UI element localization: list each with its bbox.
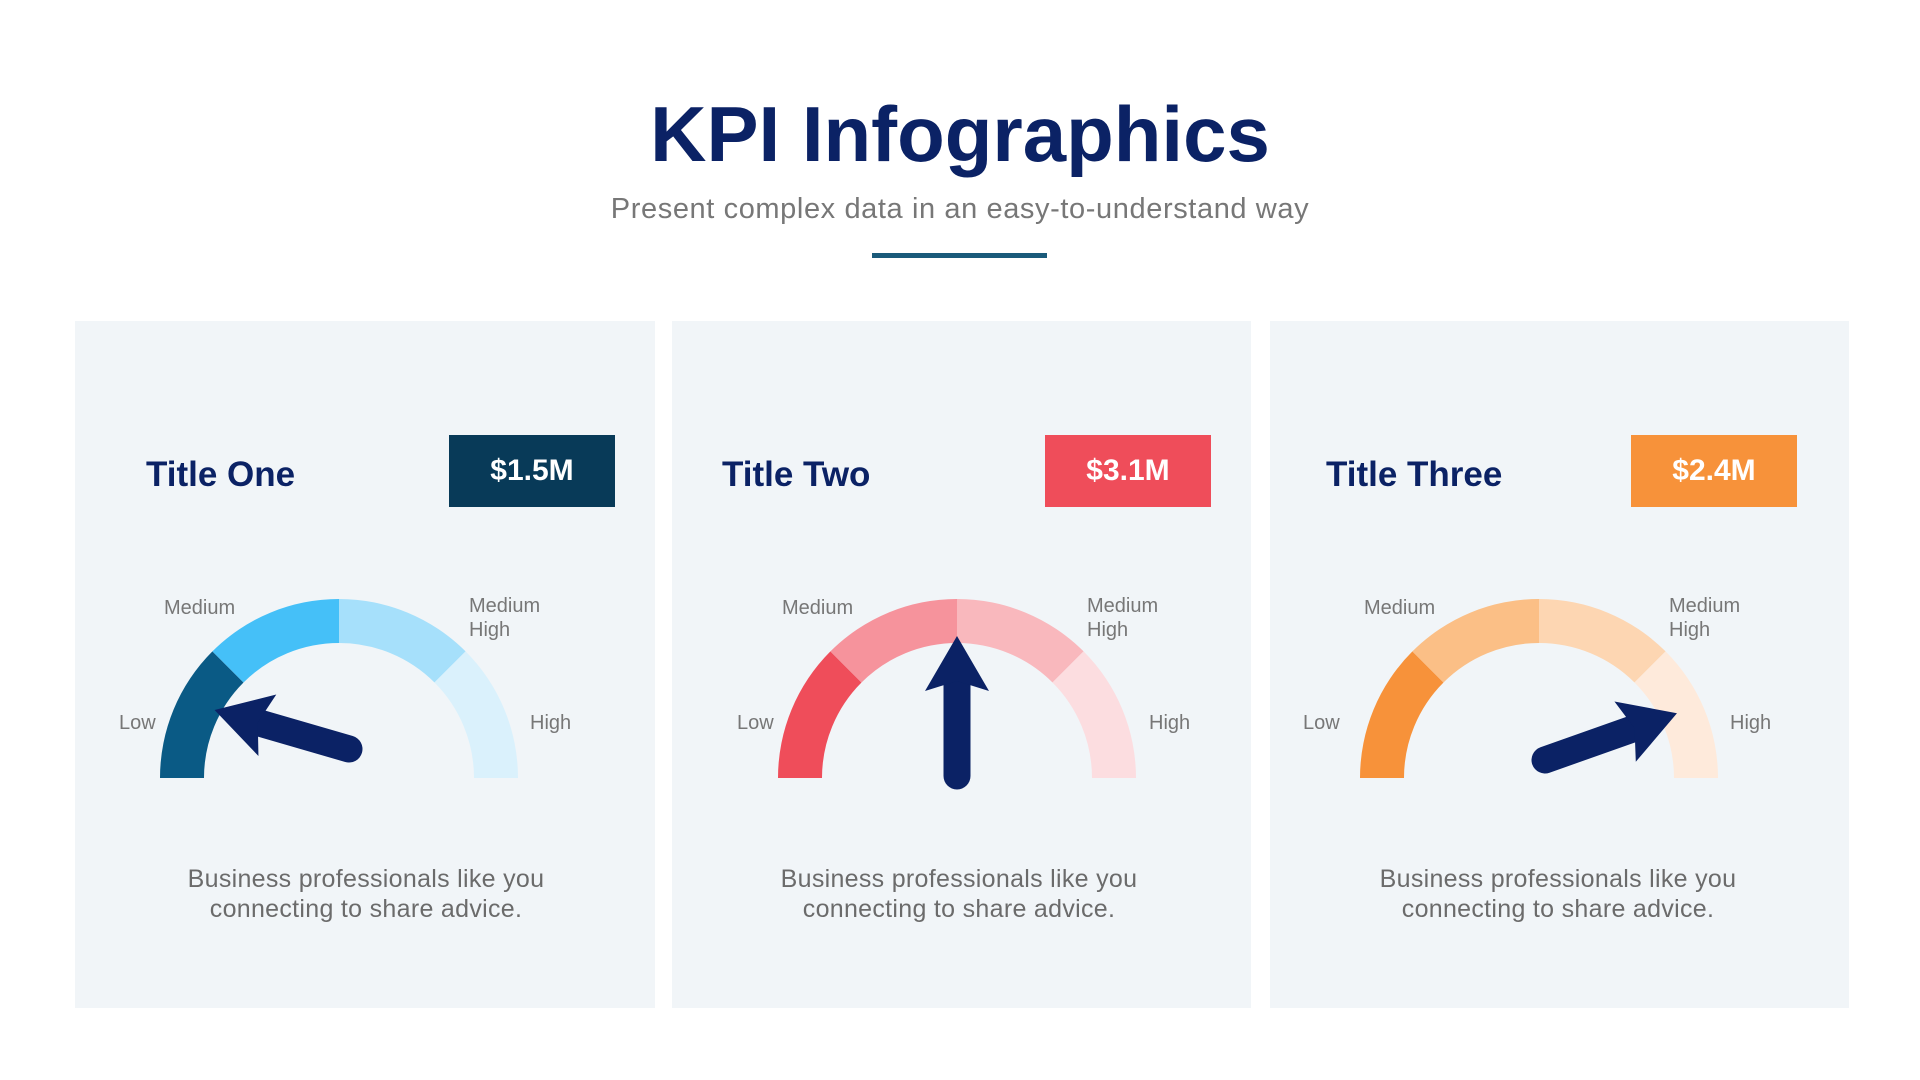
panel: two <box>672 321 1251 1008</box>
value: two: $3.1M <box>1086 454 1170 487</box>
value: one <box>449 435 615 507</box>
labels gauge one <box>119 595 571 734</box>
value: one: $1.5M <box>490 454 574 487</box>
subtitle: Present complex data in an easy-to-understand way <box>611 193 1309 225</box>
labels gauge one: High <box>530 712 571 734</box>
gauge three <box>1360 599 1718 790</box>
labels gauge three: Medium <box>1669 595 1740 617</box>
description two: Business professionals like you connecting to share advice. <box>781 865 1137 923</box>
arrow: needle two <box>925 636 989 776</box>
title: KPI Infographics <box>650 90 1270 178</box>
arrow: needle one <box>206 679 358 780</box>
labels gauge three: Medium <box>1364 597 1435 619</box>
gauge two <box>778 599 1136 778</box>
labels gauge three: Low <box>1303 712 1340 734</box>
description three: Business professionals like you connecting to share advice. <box>1380 865 1736 923</box>
labels gauge two: High <box>1149 712 1190 734</box>
labels gauge two <box>737 595 1190 734</box>
labels gauge three: High <box>1669 619 1710 641</box>
description one: Business professionals like you connecting to share advice. <box>188 865 544 923</box>
title underline <box>872 253 1047 258</box>
labels gauge one: High <box>469 619 510 641</box>
labels gauge two: High <box>1087 619 1128 641</box>
value: three: $2.4M <box>1672 454 1756 487</box>
labels gauge one: Low <box>119 712 156 734</box>
arrow: needle three <box>1534 683 1688 790</box>
labels gauge three <box>1303 595 1771 734</box>
heading: title two: Title Two <box>722 455 870 494</box>
value: three <box>1631 435 1797 507</box>
heading: title three: Title Three <box>1326 455 1502 494</box>
labels gauge one: Medium <box>164 597 235 619</box>
value: two <box>1045 435 1211 507</box>
panel: three <box>1270 321 1849 1008</box>
labels gauge one: Medium <box>469 595 540 617</box>
labels gauge two: Medium <box>1087 595 1158 617</box>
labels gauge two: Medium <box>782 597 853 619</box>
panel: one <box>75 321 655 1008</box>
gauge one <box>160 599 518 780</box>
labels gauge three: High <box>1730 712 1771 734</box>
labels gauge two: Low <box>737 712 774 734</box>
heading: title one: Title One <box>146 455 295 494</box>
